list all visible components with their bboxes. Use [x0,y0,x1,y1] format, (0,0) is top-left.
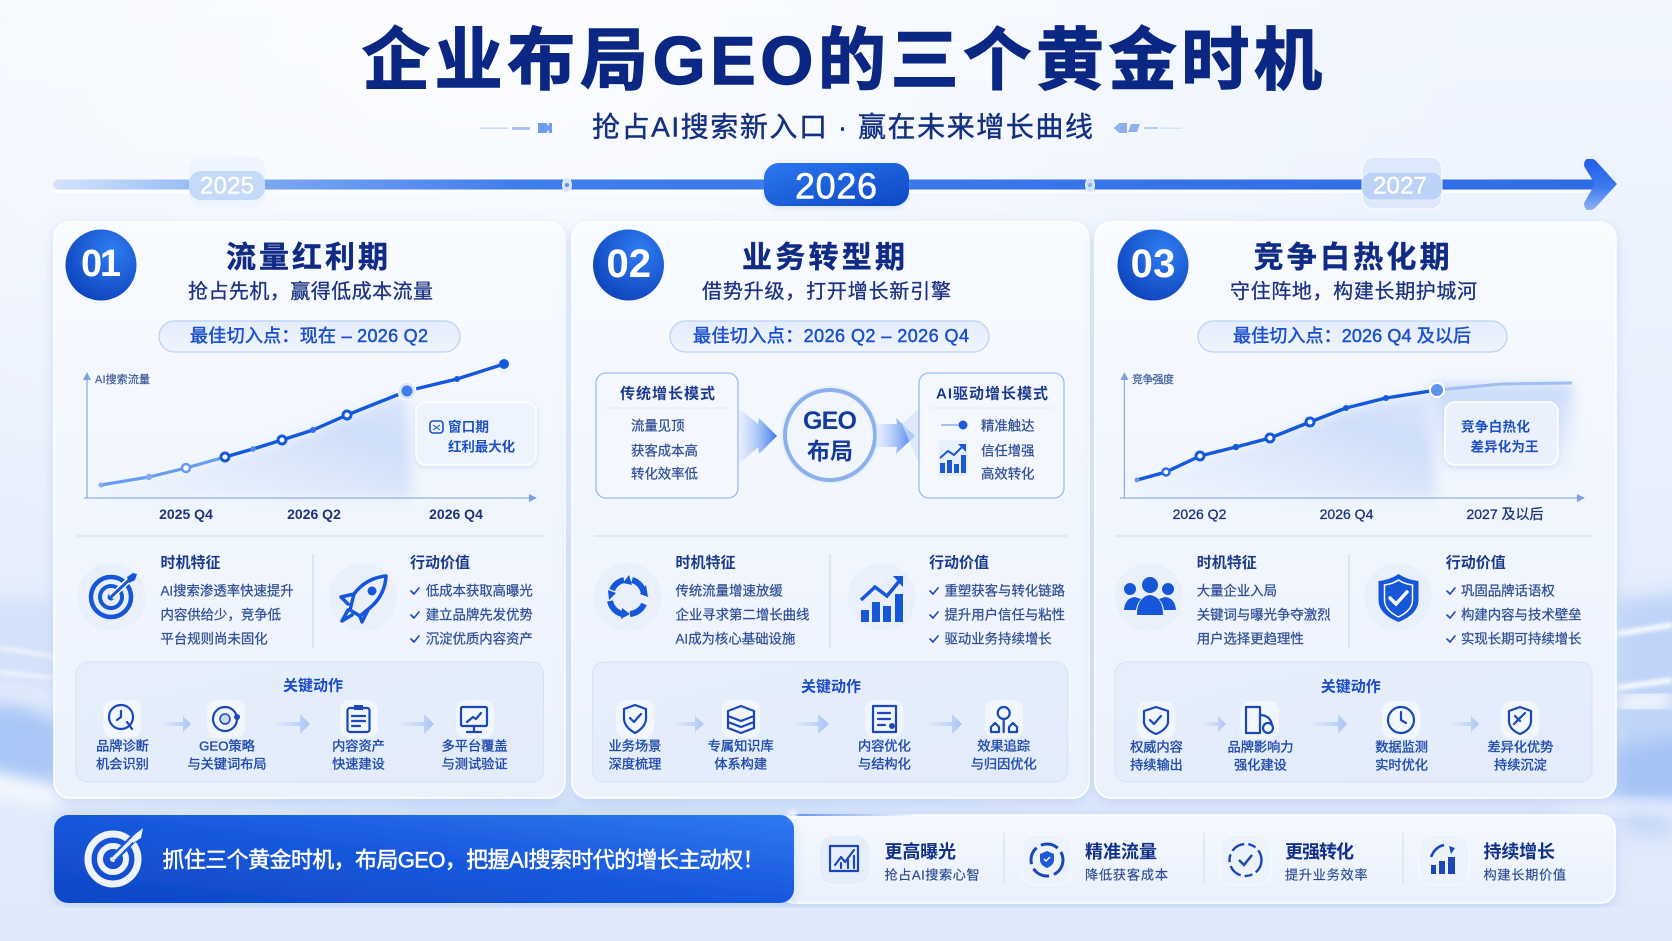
icon: cycle [594,563,662,631]
action: 数据监测: 数据监测 [1375,740,1428,754]
best entry pill [1198,321,1507,352]
行动价值 [929,554,1066,646]
line chart: AI搜索流量: 2026 Q2 [287,506,341,522]
action: 专属知识库: 体系构建 [714,756,767,772]
benefit: 持续增长: 持续增长 [1484,842,1555,862]
subheading: 抢占先机，赢得低成本流量 [188,280,433,303]
circle: GEO布局: 布局 [807,438,853,464]
行动价值: 沉淀优质内容资产 [426,630,533,646]
action: 品牌诊断: 机会识别 [96,756,149,772]
时机特征: 用户选择更趋理性 [1197,630,1304,646]
box: 传统增长模式: 流量见顶 [631,418,685,434]
arrow: left to center [739,408,777,464]
benefit: 更高曝光 [819,835,980,885]
arrow: center to right [876,418,915,454]
action: 数据监测: 实时优化 [1375,758,1428,772]
key actions: 关键动作 [801,678,861,696]
arrow [790,714,829,734]
subtitle decoration: right [1114,123,1182,133]
arrow [1202,716,1226,732]
call to action banner [54,811,920,903]
box: AI驱动增长模式: 精准触达 [981,418,1035,434]
action: 权威内容: 权威内容 [1130,738,1183,754]
year 2026: 2026 [795,166,877,206]
panel: 竞争白热化期 [1095,222,1616,798]
icon: target [78,563,146,631]
banner text: 抓住三个黄金时机，布局GEO，把握AI搜索时代的增长主动权！ [162,848,764,872]
box: 传统增长模式: 传统增长模式 [620,384,715,402]
arrow [925,714,962,734]
line chart: AI搜索流量: AI搜索流量 [95,372,150,386]
行动价值: 行动价值 [929,554,989,572]
时机特征: 时机特征 [1197,554,1257,572]
action: 差异化优势: 持续沉淀 [1494,758,1547,772]
subtitle decoration: left [480,123,552,133]
benefit: 更强转化: 更强转化 [1285,841,1354,862]
arrow [673,716,704,732]
key actions [1115,662,1592,782]
callout: 窗口期 [416,402,536,465]
benefit: 精准流量: 精准流量 [1085,842,1157,862]
benefit: 持续增长 [1419,835,1566,885]
行动价值 [410,554,533,646]
benefit: 更强转化: 提升业务效率 [1285,866,1368,882]
box: AI驱动增长模式: AI驱动增长模式 [936,384,1048,402]
subtitle: 抢占AI搜索新入口 · 赢在未来增长曲线 [592,112,1093,142]
arrow [272,714,310,734]
action: 品牌影响力: 强化建设 [1234,758,1287,772]
line chart: 竞争强度: 2026 Q4 [1320,506,1374,522]
action: 内容资产 [332,700,385,772]
时机特征 [676,554,809,646]
时机特征 [1197,554,1331,646]
action: 效果追踪: 与归因优化 [971,756,1037,772]
action: GEO策略 [187,700,267,772]
时机特征: 时机特征 [676,554,736,572]
时机特征: 传统流量增速放缓 [676,584,783,598]
action: 差异化优势: 差异化优势 [1487,740,1553,754]
action: 业务场景: 业务场景 [609,738,661,754]
时机特征 [160,554,294,646]
行动价值: 实现长期可持续增长 [1461,632,1582,646]
badge 03 [1118,230,1188,300]
footer benefits panel [780,815,1615,903]
行动价值: 构建内容与技术壁垒 [1461,606,1582,622]
action: 业务场景 [609,700,661,772]
best entry pill: 最佳切入点：2026 Q2 – 2026 Q4 [693,326,969,346]
box: AI驱动增长模式: 信任增强 [981,444,1035,458]
arrow fan [902,408,919,464]
action: 专属知识库 [708,700,774,772]
icon: target white [88,828,143,884]
line chart: AI搜索流量: 2026 Q4 [429,506,483,522]
timeline node: mid 2 [1086,178,1094,192]
line chart: 竞争强度 [1120,372,1585,522]
timeline [53,157,1617,210]
year 2025 [189,157,265,207]
时机特征: 平台规则尚未固化 [160,632,268,646]
heading: 流量红利期 [226,242,388,274]
arrow [1309,714,1347,734]
timeline arrow head [1584,159,1617,210]
时机特征: 企业寻求第二增长曲线 [676,606,809,622]
benefit: 持续增长: 构建长期价值 [1484,868,1566,882]
year 2025: 2025 [200,172,254,200]
benefit: 更高曝光: 抢占AI搜索心智 [884,866,980,882]
callout: 竞争白热化: 竞争白热化 [1461,418,1530,434]
panel: 流量红利期 [54,222,565,798]
box: 传统增长模式: 获客成本高 [631,442,698,458]
arrow [1450,716,1479,732]
panel: 业务转型期 [572,222,1089,798]
行动价值: 低成本获取高曝光 [426,582,533,598]
timeline bar [53,180,1603,190]
时机特征: 内容供给少，竞争低 [160,606,281,622]
badge 03: 03 [1131,242,1175,286]
key actions [76,662,544,782]
action: 多平台覆盖: 多平台覆盖 [442,738,508,754]
action: 内容优化: 内容优化 [858,738,911,754]
action: 业务场景: 深度梳理 [609,756,661,772]
callout: 竞争白热化: 差异化为王 [1470,438,1538,454]
benefit: 精准流量 [1022,835,1168,885]
action: 内容优化 [858,700,911,772]
line chart: AI搜索流量 [83,359,537,522]
key actions: 关键动作 [1321,678,1381,696]
行动价值: 巩固品牌话语权 [1461,582,1555,598]
时机特征: 大量企业入局 [1197,582,1277,598]
subheading: 守住阵地，构建长期护城河 [1230,280,1477,303]
best entry pill: 最佳切入点：2026 Q4 及以后 [1233,326,1471,346]
callout: 竞争白热化 [1445,402,1558,465]
year 2026 [764,163,909,206]
行动价值: 驱动业务持续增长 [944,632,1052,646]
line chart: 竞争强度: 竞争强度 [1132,372,1174,386]
title: 企业布局GEO的三个黄金时机 [362,23,1322,99]
box: 传统增长模式: 转化效率低 [631,466,698,482]
action: 多平台覆盖: 与测试验证 [442,756,508,772]
行动价值: 提升用户信任与粘性 [944,606,1065,622]
badge 02 [593,230,664,300]
box: AI驱动增长模式: 高效转化 [981,466,1035,482]
box: AI驱动增长模式 [919,373,1064,498]
行动价值: 重塑获客与转化链路 [944,582,1066,598]
subheading: 借势升级，打开增长新引擎 [702,280,951,303]
box: 传统增长模式 [596,373,738,498]
callout: 窗口期: 窗口期 [448,418,489,434]
action: 效果追踪: 效果追踪 [977,738,1030,754]
action: 内容资产: 快速建设 [332,756,385,772]
callout: 窗口期: 红利最大化 [448,438,516,454]
行动价值: 建立品牌先发优势 [426,606,533,622]
action: 权威内容: 持续输出 [1130,758,1183,772]
best entry pill: 最佳切入点：现在 – 2026 Q2 [190,326,428,346]
best entry pill [159,321,460,352]
action: GEO策略: GEO策略 [199,738,255,754]
行动价值: 行动价值 [1446,554,1506,572]
benefit: 更强转化 [1220,835,1368,885]
benefit: 更高曝光: 更高曝光 [884,841,956,862]
circle: GEO布局: GEO [803,407,857,435]
action: 专属知识库: 专属知识库 [708,738,774,754]
badge 02: 02 [606,242,651,286]
best entry pill [670,321,989,352]
action: 品牌影响力 [1228,701,1293,772]
heading: 竞争白热化期 [1254,242,1450,274]
timeline glow [53,190,1593,193]
arrow [398,714,434,734]
action: 多平台覆盖 [442,700,508,772]
icon: mini chart [938,440,968,476]
icon: shield [1364,563,1432,631]
时机特征: AI成为核心基础设施 [676,630,795,646]
line chart: 竞争强度: 2027 及以后 [1466,506,1544,522]
时机特征: AI搜索渗透率快速提升 [160,582,294,598]
key actions [593,662,1068,782]
action: GEO策略: 与关键词布局 [187,756,267,772]
line chart: AI搜索流量: 2025 Q4 [159,506,213,522]
benefit: 精准流量: 降低获客成本 [1085,866,1168,882]
action: 权威内容 [1130,701,1183,772]
时机特征: 时机特征 [160,554,221,572]
时机特征: 关键词与曝光争夺激烈 [1197,608,1331,622]
timeline node: mid 1 [562,178,572,192]
year 2027: 2027 [1373,172,1427,200]
circle: GEO布局 [781,386,879,484]
icon: growth chart [848,563,916,631]
icon: people [1115,563,1183,631]
行动价值 [1446,554,1582,646]
badge 01 [66,230,136,300]
行动价值: 行动价值 [410,554,470,572]
action: 数据监测 [1375,701,1428,772]
icon: target dot [941,420,968,430]
badge 01: 01 [81,243,121,285]
key actions: 关键动作 [283,676,343,694]
action: 品牌诊断 [96,700,149,772]
icon: rocket [329,563,397,631]
line chart: 竞争强度: 2026 Q2 [1173,506,1227,522]
action: 差异化优势 [1487,701,1553,772]
heading: 业务转型期 [742,242,905,274]
action: 品牌影响力: 品牌影响力 [1228,738,1293,754]
action: 品牌诊断: 品牌诊断 [96,738,149,754]
year 2027 [1362,157,1442,209]
action: 内容优化: 与结构化 [858,756,911,772]
arrow [160,716,191,732]
action: 效果追踪 [971,700,1037,772]
action: 内容资产: 内容资产 [332,738,385,754]
